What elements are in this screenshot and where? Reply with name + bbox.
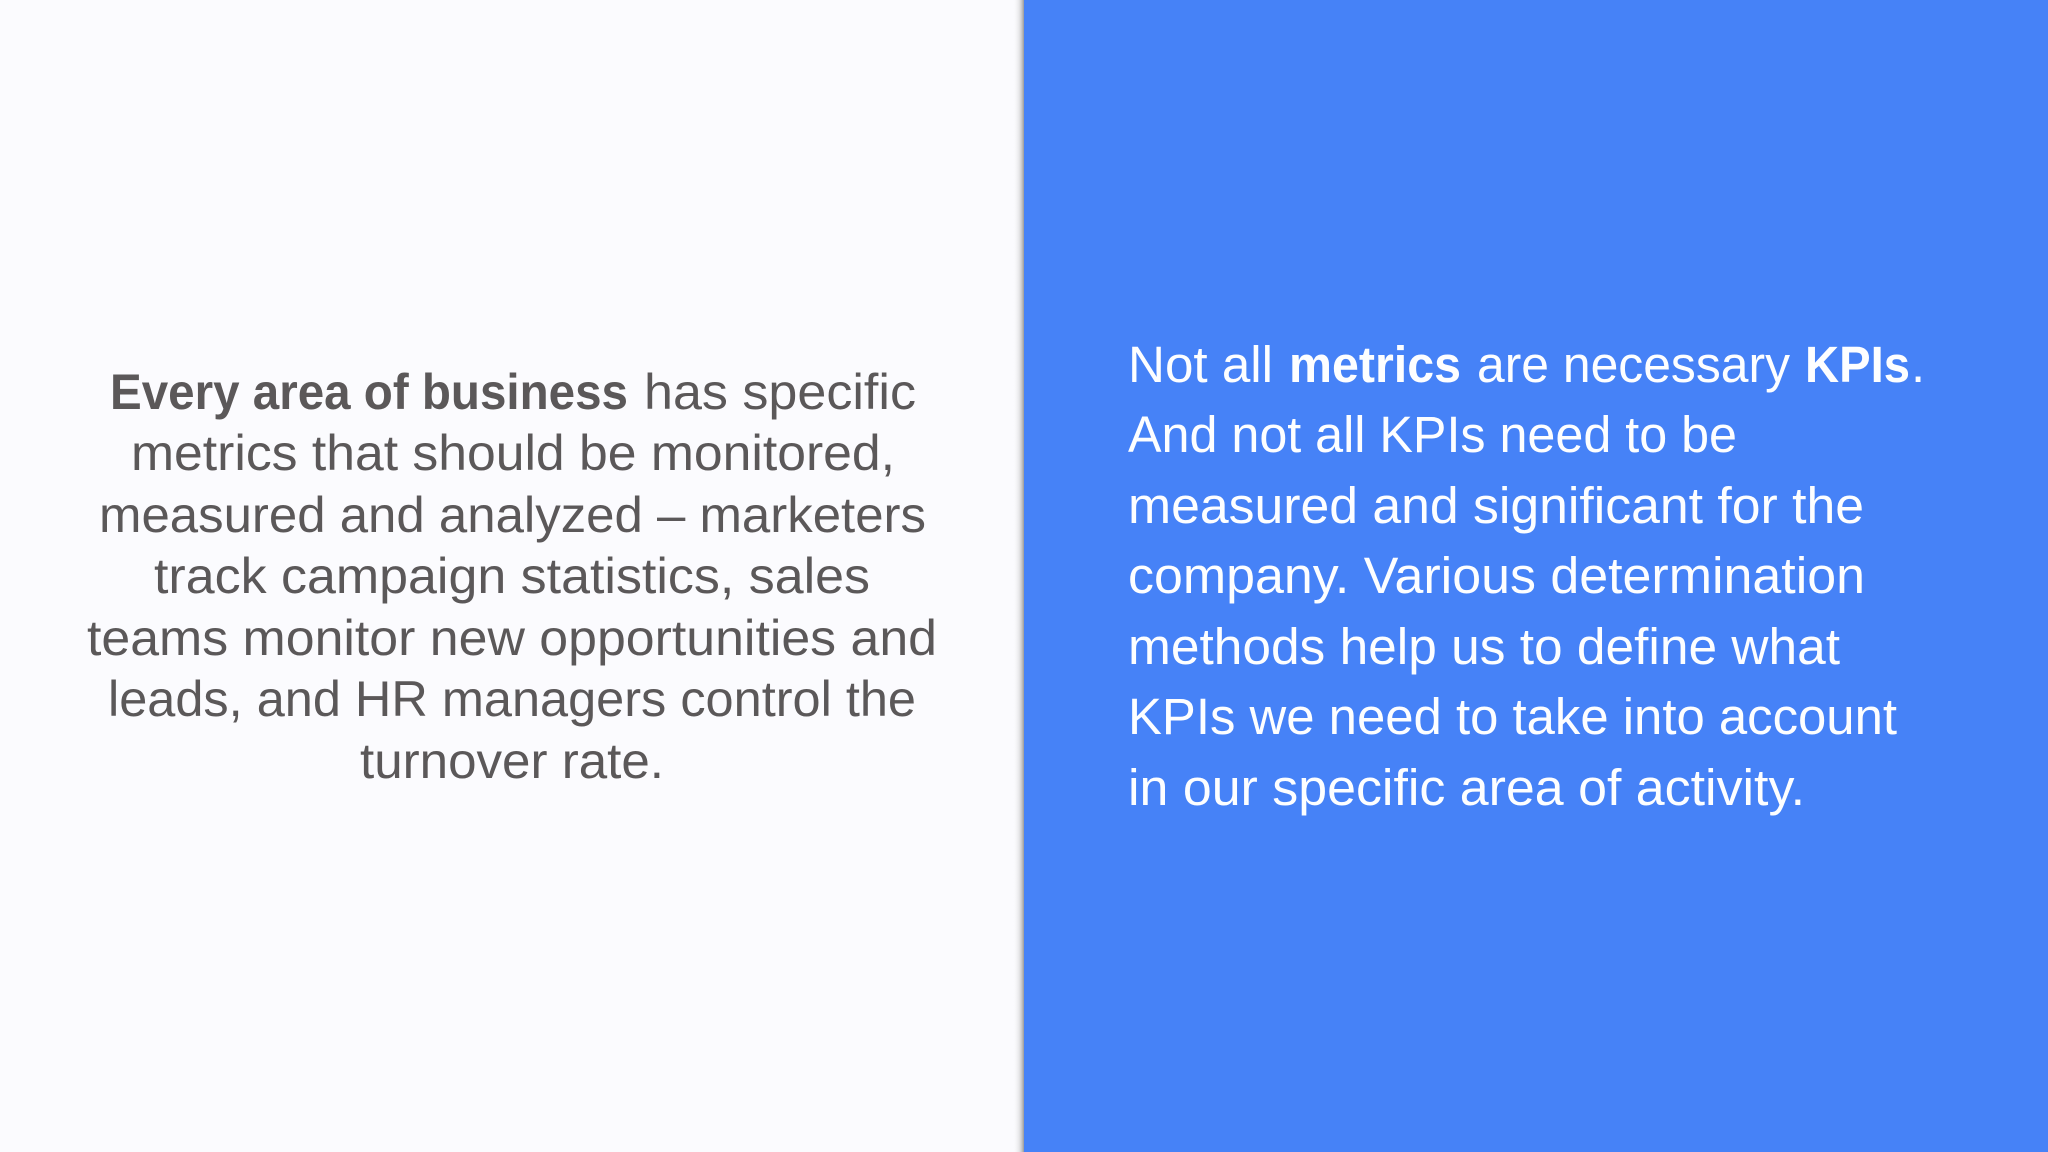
panel: right blue background <box>1024 0 2048 1152</box>
text block: left paragraph on business metrics: turnover rate. <box>360 733 664 789</box>
text block: right paragraph on KPIs <box>1128 336 1925 816</box>
text block: left paragraph on business metrics: track campaign statistics, sales <box>154 548 870 604</box>
text block: left paragraph on business metrics: metrics that should be monitored, <box>131 425 895 481</box>
text block: right paragraph on KPIs: And not all KPIs need to be <box>1128 406 1737 463</box>
text block: right paragraph on KPIs: in our specific area of activity. <box>1128 759 1805 816</box>
text block: left paragraph on business metrics: Every area of business <box>110 364 628 420</box>
text block: right paragraph on KPIs: metrics <box>1289 336 1461 393</box>
panel: left white background <box>0 0 1024 1152</box>
text block: right paragraph on KPIs: company. Various determination <box>1128 547 1865 604</box>
text block: left paragraph on business metrics: leads, and HR managers control the <box>108 671 916 727</box>
text block: left paragraph on business metrics <box>87 364 937 789</box>
text block: left paragraph on business metrics: teams monitor new opportunities and <box>87 610 937 666</box>
text block: right paragraph on KPIs: . <box>1911 336 1925 393</box>
text block: right paragraph on KPIs: KPIs <box>1805 336 1910 393</box>
text block: left paragraph on business metrics: measured and analyzed – marketers <box>99 487 926 543</box>
text block: right paragraph on KPIs: are necessary <box>1477 336 1790 393</box>
text block: right paragraph on KPIs: measured and significant for the <box>1128 477 1864 534</box>
text block: left paragraph on business metrics: has specific <box>644 364 916 420</box>
text block: right paragraph on KPIs: KPIs we need to take into account <box>1128 688 1897 745</box>
text block: right paragraph on KPIs: Not all <box>1128 336 1273 393</box>
text block: right paragraph on KPIs: methods help us to define what <box>1128 618 1840 675</box>
